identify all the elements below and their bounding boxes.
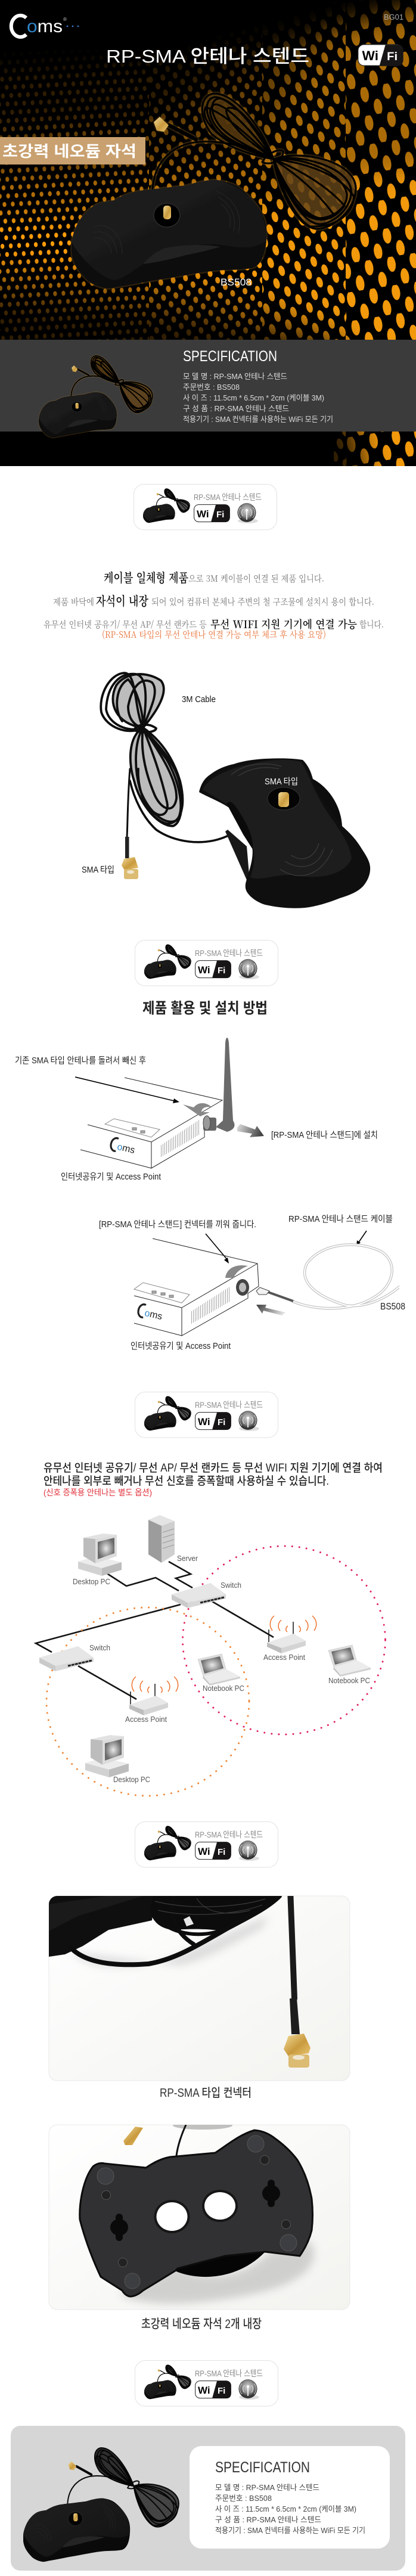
caption: magnets: 초강력 네오듐 자석 2개 내장 (141, 2317, 262, 2331)
router logo (110, 1137, 136, 1156)
label: SMA type on stand: SMA 타입 (265, 777, 298, 787)
router port (236, 1279, 249, 1296)
spec list: 적용기기 : SMA 컨넥터를 사용하는 WiFi 모든 기기 (215, 2526, 365, 2535)
desktop PC 2 (85, 1735, 150, 1784)
router (80, 1078, 222, 1168)
spec list: 모 델 명 : RP-SMA 안테나 스텐드 (215, 2483, 319, 2492)
desktop PC 1 (73, 1534, 122, 1586)
product badge 2: Fi (218, 966, 225, 976)
spec list (215, 2483, 365, 2535)
server (148, 1515, 198, 1563)
spec list: 주문번호 : BS508 (183, 383, 240, 392)
product badge 4: Wi (198, 1846, 210, 1857)
spec list (183, 372, 333, 424)
product badge 2: RP-SMA 안테나 스텐드 (195, 948, 263, 958)
keyholes (110, 2180, 280, 2241)
icon: wifi badge: Wi (362, 48, 378, 63)
model label: BS508 (380, 1302, 405, 1312)
notebook 2 (328, 1645, 371, 1685)
tag: magnet: 초강력 네오듐 자석 (2, 142, 136, 160)
spec list: 구 성 품 : RP-SMA 안테나 스텐드 (215, 2515, 321, 2524)
text block: product description: 무선 WIFI 지원 기기에 연결 가능 (210, 616, 358, 632)
spec card (190, 2446, 390, 2549)
panel: bottom specification (11, 2426, 405, 2571)
model label: BS508 (221, 277, 252, 288)
label: SMA type on cable: SMA 타입 (82, 865, 114, 875)
server: Server (177, 1554, 198, 1563)
product photo (72, 94, 356, 288)
magnet hole 1 (154, 2200, 190, 2233)
text block: product description: 유무선 인터넷 공유기/ 무선 AP/ 무선 랜카드 등 (44, 618, 207, 631)
icon: wifi badge (358, 45, 403, 66)
heading: usage and installation: 제품 활용 및 설치 방법 (142, 1000, 268, 1017)
diagram: removing antenna (15, 1038, 378, 1182)
text block: product description: 제품 바닥에 (53, 595, 94, 608)
product badge 5: RP-SMA 안테나 스텐드 (195, 2369, 263, 2378)
spec list: 사 이 즈 : 11.5cm * 6.5cm * 2cm (케이블 3M) (215, 2504, 356, 2513)
text block: product description: 으로 3M 케이블이 연결 된 제품 입니다. (188, 572, 324, 585)
desktop PC 2: Desktop PC (113, 1775, 150, 1784)
spec heading: SPECIFICATION (183, 348, 277, 365)
spec list: 적용기기 : SMA 컨넥터를 사용하는 WiFi 모든 기기 (183, 415, 333, 424)
product badge 2 (135, 941, 278, 986)
product badge 1: Fi (216, 510, 224, 520)
product badge 3: RP-SMA 안테나 스텐드 (195, 1400, 263, 1410)
spec list: 주문번호 : BS508 (215, 2494, 272, 2503)
network diagram (36, 1515, 385, 1796)
code label: BG01 (384, 13, 403, 21)
logo: Coms (11, 15, 79, 37)
hero section (0, 0, 416, 466)
connector ferrule (125, 837, 129, 858)
panel: specification (0, 340, 416, 438)
text block: wifi usage (44, 1461, 383, 1497)
product badge 1 (134, 484, 277, 530)
router logo: oms (116, 1142, 136, 1156)
cable coil (268, 1244, 405, 1308)
text block: wifi usage: 유무선 인터넷 공유기/ 무선 AP/ 무선 랜카드 등 무선 WIFI 지원 기기에 연결 하여 (44, 1461, 383, 1475)
text block: product description: (RP-SMA 타입의 무선 안테나 연결 가능 여부 체크 후 사용 요망) (102, 628, 326, 641)
gradient arrow (237, 1124, 264, 1137)
installation text: [RP-SMA 안테나 스탠드]에 설치 (271, 1130, 378, 1140)
instruction text: 기존 SMA 타입 안테나를 돌려서 빼신 후 (15, 1056, 146, 1066)
switch 2: Switch (89, 1643, 110, 1652)
product thumbnail (39, 356, 153, 438)
title: RP-SMA 안테나 스텐드 (106, 46, 309, 67)
product photo: stand with cable (82, 673, 370, 908)
tag: magnet (0, 137, 145, 165)
arrow: to antenna (75, 1077, 179, 1103)
icon: wifi badge: Fi (387, 50, 398, 63)
product badge 5: Fi (218, 2386, 225, 2396)
product badge 4 (135, 1821, 278, 1867)
access point right (263, 1616, 316, 1662)
magnet hole 2 (202, 2190, 238, 2222)
product badge 2: Wi (198, 964, 210, 976)
product badge 5 (135, 2360, 278, 2406)
cable plug (256, 1287, 269, 1295)
product badge 1: RP-SMA 안테나 스텐드 (194, 492, 262, 502)
coverage circle: orange (46, 1607, 249, 1796)
switch 1 (172, 1581, 241, 1608)
text block: product description (44, 569, 384, 641)
text block: product description: 자석이 내장 (96, 592, 149, 610)
switch 1: Switch (221, 1581, 241, 1590)
text block: wifi usage: 안테나를 외부로 빼거나 무선 신호를 증폭할때 사용하실 수 있습니다. (44, 1475, 329, 1488)
instruction text: [RP-SMA 안테나 스탠드] 컨넥터를 끼워 줍니다. (99, 1219, 256, 1230)
router logo: oms (144, 1308, 163, 1322)
notebook 2: Notebook PC (328, 1676, 370, 1685)
gradient arrow (256, 1305, 285, 1315)
product badge 5: Wi (198, 2385, 210, 2396)
diagram: connecting stand (99, 1214, 405, 1351)
photo: RP-SMA connector (49, 1889, 350, 2081)
product badge 4: Fi (218, 1847, 225, 1857)
spec list: 구 성 품 : RP-SMA 안테나 스텐드 (183, 404, 289, 413)
logo: Coms: ® (63, 17, 67, 22)
product badge 3: Fi (218, 1417, 225, 1427)
text block: product description: 되어 있어 컴퓨터 본체나 주변의 철 구조물에 설치시 용이 합니다. (151, 595, 374, 608)
access point left (125, 1677, 178, 1724)
text block: wifi usage: (신호 증폭용 안테나는 별도 옵션) (44, 1488, 152, 1497)
product badge 3: Wi (198, 1416, 210, 1427)
access point left: Access Point (125, 1715, 167, 1724)
spec list: 사 이 즈 : 11.5cm * 6.5cm * 2cm (케이블 3M) (183, 393, 324, 402)
router (134, 1239, 259, 1336)
router logo (137, 1303, 164, 1322)
product badge 4: RP-SMA 안테나 스텐드 (195, 1830, 263, 1839)
text block: product description: 케이블 일체형 제품 (104, 569, 188, 586)
logo: Coms: oms (27, 17, 63, 36)
notebook 1 (198, 1654, 244, 1693)
product badge 3 (135, 1392, 278, 1438)
stand body (225, 830, 250, 888)
curved arrow: rotate (225, 1265, 248, 1278)
product badge 1: Wi (197, 508, 209, 520)
caption: connector: RP-SMA 타입 컨넥터 (160, 2086, 252, 2100)
gold connector (122, 857, 138, 879)
coverage circle: pink (182, 1546, 385, 1734)
label: 3M cable: 3M Cable (182, 694, 216, 704)
switch 2 (39, 1643, 110, 1671)
arrow: to cable (356, 1231, 367, 1246)
spec list: 모 델 명 : RP-SMA 안테나 스텐드 (183, 372, 287, 381)
cable label: RP-SMA 안테나 스탠드 케이블 (288, 1214, 393, 1224)
curved arrow: rotate (183, 1103, 212, 1116)
product photo (23, 2448, 179, 2562)
access point right: Access Point (263, 1653, 305, 1662)
device caption: 인터넷공유기 및 Access Point (61, 1172, 162, 1182)
notebook 1: Notebook PC (203, 1684, 244, 1693)
antenna (203, 1038, 235, 1132)
screws (101, 2155, 291, 2267)
magnetic base plate (80, 2130, 312, 2296)
rubber feet (97, 2136, 297, 2289)
spec heading: SPECIFICATION (215, 2459, 310, 2476)
desktop PC 1: Desktop PC (73, 1577, 110, 1586)
arrow: to connector (206, 1234, 229, 1264)
photo: magnets on underside (49, 2121, 350, 2310)
network cables (36, 1562, 274, 1699)
device caption: 인터넷공유기 및 Access Point (131, 1341, 231, 1351)
text block: product description: 합니다. (359, 618, 384, 631)
